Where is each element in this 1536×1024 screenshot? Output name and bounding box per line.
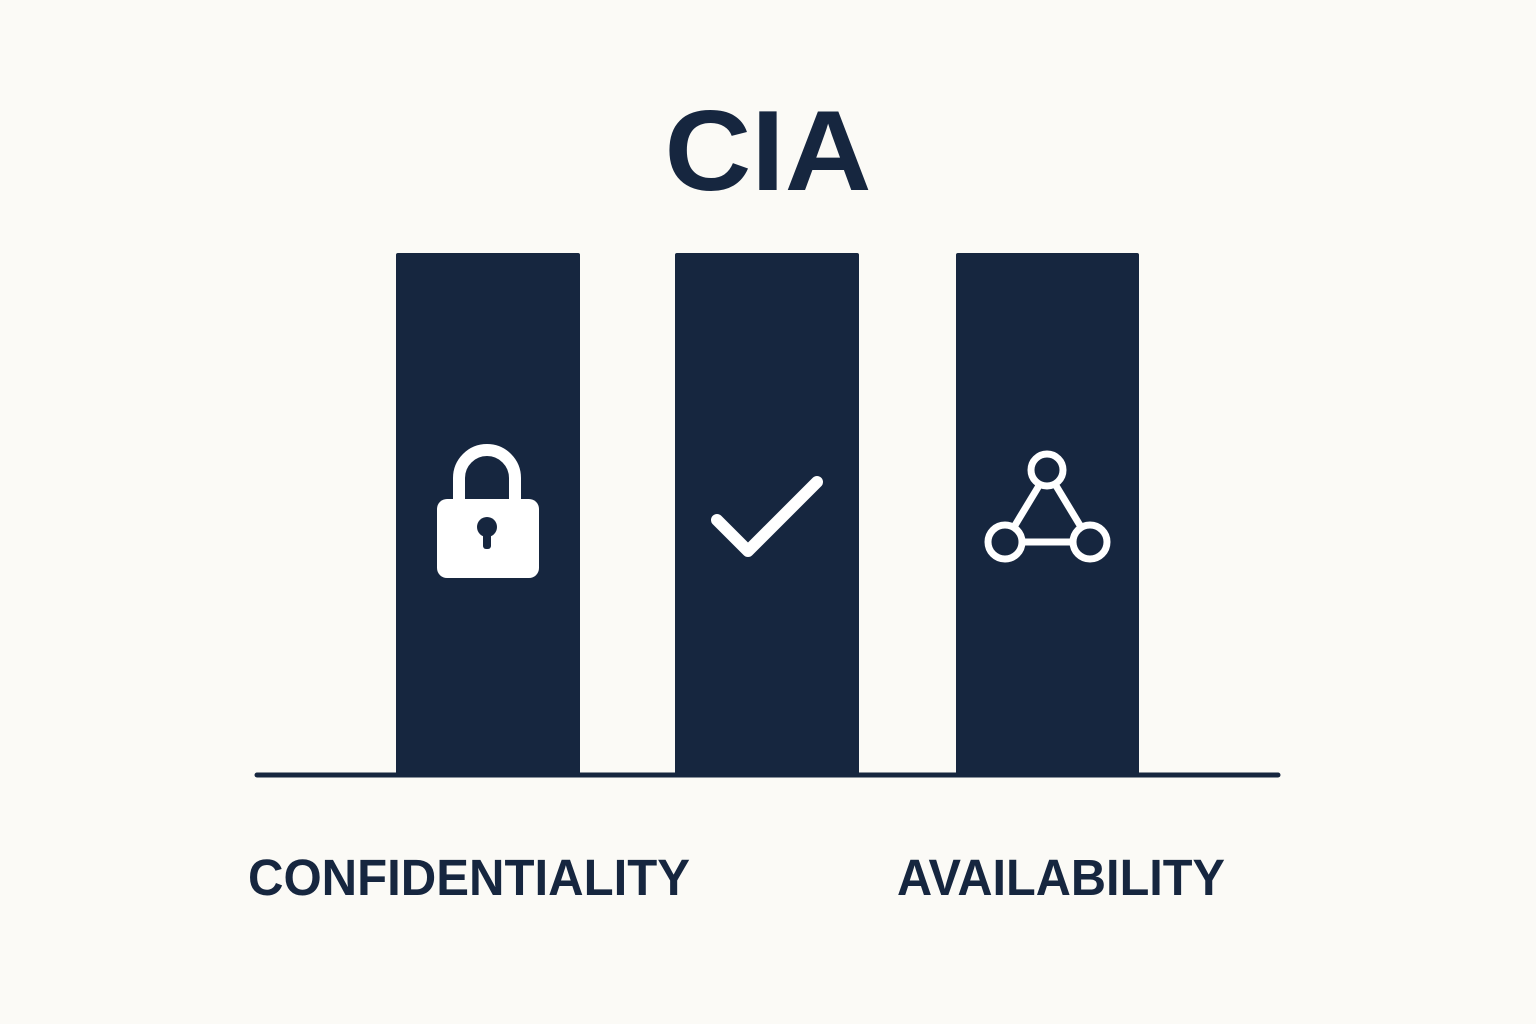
bar: integrity	[675, 253, 859, 775]
title: CIA	[664, 88, 872, 215]
bar: availability	[956, 253, 1139, 775]
baseline	[257, 772, 1278, 778]
icon: checkmark	[717, 482, 817, 551]
icon: network triangle	[988, 454, 1107, 559]
icon: lock	[437, 450, 539, 578]
label: availability: AVAILABILITY	[897, 849, 1225, 906]
label: confidentiality: CONFIDENTIALITY	[248, 849, 690, 906]
bar: confidentiality	[396, 253, 580, 775]
